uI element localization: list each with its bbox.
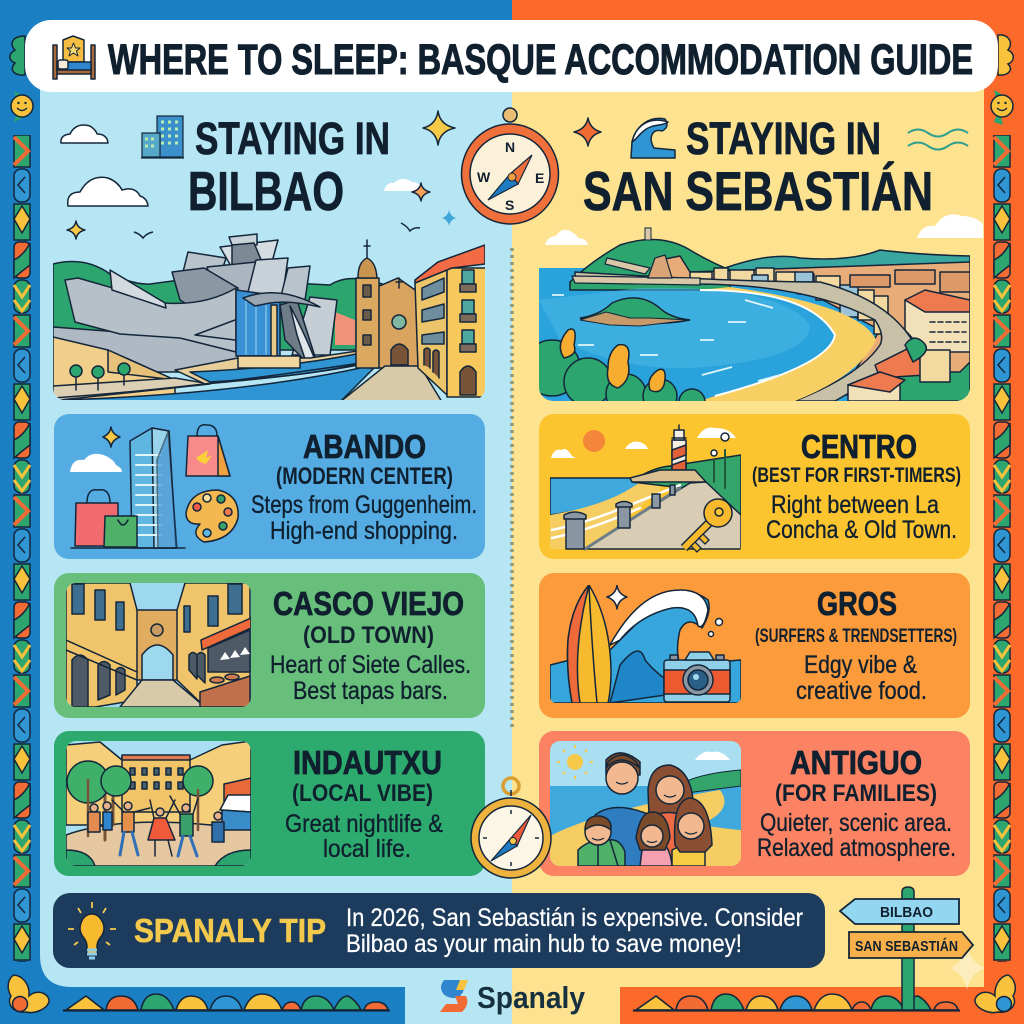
- breakwater and fort: [572, 258, 700, 285]
- sign: Bilbao: [840, 899, 959, 924]
- panel heading: Staying in Bilbao: BILBAO: [188, 160, 344, 222]
- left border decorations: [8, 36, 390, 1024]
- trees: [70, 363, 130, 390]
- compass: top center: S: [505, 197, 514, 213]
- island: [580, 298, 690, 324]
- card text: INDAUTXU: [293, 744, 442, 781]
- card: Antiguo: (FOR FAMILIES): [775, 780, 937, 807]
- compass: top center: [462, 108, 558, 224]
- icon: water ripples: [908, 130, 968, 150]
- title banner: [25, 20, 998, 92]
- right border decorations: [633, 35, 1015, 1024]
- card text: CASCO VIEJO: [273, 585, 464, 622]
- card: Casco Viejo: [54, 573, 485, 718]
- icon: bed: [53, 36, 95, 79]
- bottom right roofs: [848, 338, 970, 401]
- card text: GROS: [817, 585, 897, 622]
- card: Abando: High-end shopping.: [270, 517, 458, 545]
- card: Antiguo: [539, 731, 970, 876]
- bottom left foliage: [539, 328, 706, 401]
- panel heading: Staying in San Sebastián: SAN SEBASTIÁN: [583, 160, 933, 222]
- icon: wave: [631, 118, 675, 158]
- card: Antiguo: Quieter, scenic area.: [760, 809, 952, 837]
- card: Abando: [54, 414, 485, 559]
- card: Casco Viejo: (OLD TOWN): [303, 622, 434, 649]
- tip banner: [53, 893, 825, 968]
- tip banner: Bilbao as your main hub to save money!: [346, 930, 742, 958]
- illustration: Guggenheim Bilbao scene: [53, 234, 486, 402]
- card: Abando: (MODERN CENTER): [276, 463, 453, 490]
- key: [684, 499, 732, 552]
- panel heading: Staying in Bilbao: [141, 113, 390, 222]
- central dotted divider: [510, 248, 514, 730]
- card text: ANTIGUO: [790, 744, 922, 781]
- logo: Spanaly: [440, 980, 586, 1015]
- heading text: STAYING IN: [686, 113, 881, 164]
- card: Centro: [539, 414, 970, 559]
- signpost: BILBAO: [880, 904, 933, 921]
- card: Indautxu: (LOCAL VIBE): [292, 780, 433, 807]
- card: Gros: [539, 573, 970, 718]
- tip text: In 2026, San Sebastián is expensive. Consider: [346, 904, 803, 932]
- church: [356, 240, 418, 368]
- bay shallows and sand: [575, 272, 915, 401]
- illustration: plaza with dancers: [66, 741, 251, 866]
- illustration: family on the beach: [550, 741, 741, 866]
- card: Antiguo: Relaxed atmosphere.: [757, 834, 956, 862]
- museum: [53, 234, 355, 372]
- illustration: tower, bags and palette: [70, 425, 238, 548]
- compass: top center: E: [535, 170, 544, 186]
- signpost: SAN SEBASTIÁN: [855, 938, 958, 955]
- illustration: La Concha bay scene: [539, 228, 970, 401]
- card: Centro: Right between La: [771, 491, 939, 519]
- icon: city buildings: [141, 116, 184, 158]
- compass: top center: N: [505, 139, 515, 155]
- distant mountains: [725, 249, 970, 270]
- card: Centro: Concha & Old Town.: [766, 516, 957, 544]
- card text: ABANDO: [303, 428, 426, 465]
- logo: Spanaly: Spanaly: [477, 980, 586, 1015]
- surface highlights: [552, 295, 780, 381]
- Urgull hill: [570, 240, 730, 290]
- card: Centro: (BEST FOR FIRST-TIMERS): [752, 464, 961, 487]
- sky decorations: clouds, stars and birds: [61, 111, 985, 990]
- icon: light bulb: [68, 902, 116, 958]
- card: Indautxu: [54, 731, 485, 876]
- card: Abando: Steps from Guggenheim.: [251, 491, 477, 519]
- card text: CENTRO: [801, 428, 917, 465]
- city blocks: [660, 256, 970, 395]
- plaza, pool and river: [53, 337, 380, 402]
- card: Gros: Edgy vibe &: [804, 651, 917, 679]
- card: Indautxu: Great nightlife &: [285, 810, 443, 838]
- heading text: STAYING IN: [195, 113, 390, 164]
- compass: bottom center: [471, 778, 551, 878]
- signpost: [840, 887, 973, 1010]
- hills: [53, 262, 420, 350]
- compass: top center: W: [477, 169, 491, 185]
- panel heading: Staying in San Sebastián: [583, 113, 968, 222]
- tip label: SPANALY TIP: [134, 912, 326, 949]
- illustration: surfboard, wave and camera: [550, 585, 741, 703]
- card: Casco Viejo: Heart of Siete Calles.: [270, 651, 471, 679]
- illustration: old town street: [66, 583, 251, 707]
- apartment building: [340, 245, 486, 402]
- card: Gros: creative food.: [796, 677, 927, 705]
- card: Indautxu: local life.: [323, 835, 411, 863]
- sign: San Sebastián: [849, 932, 973, 958]
- illustration: promenade, lighthouse and key: [550, 425, 741, 552]
- card: Casco Viejo: Best tapas bars.: [293, 677, 448, 705]
